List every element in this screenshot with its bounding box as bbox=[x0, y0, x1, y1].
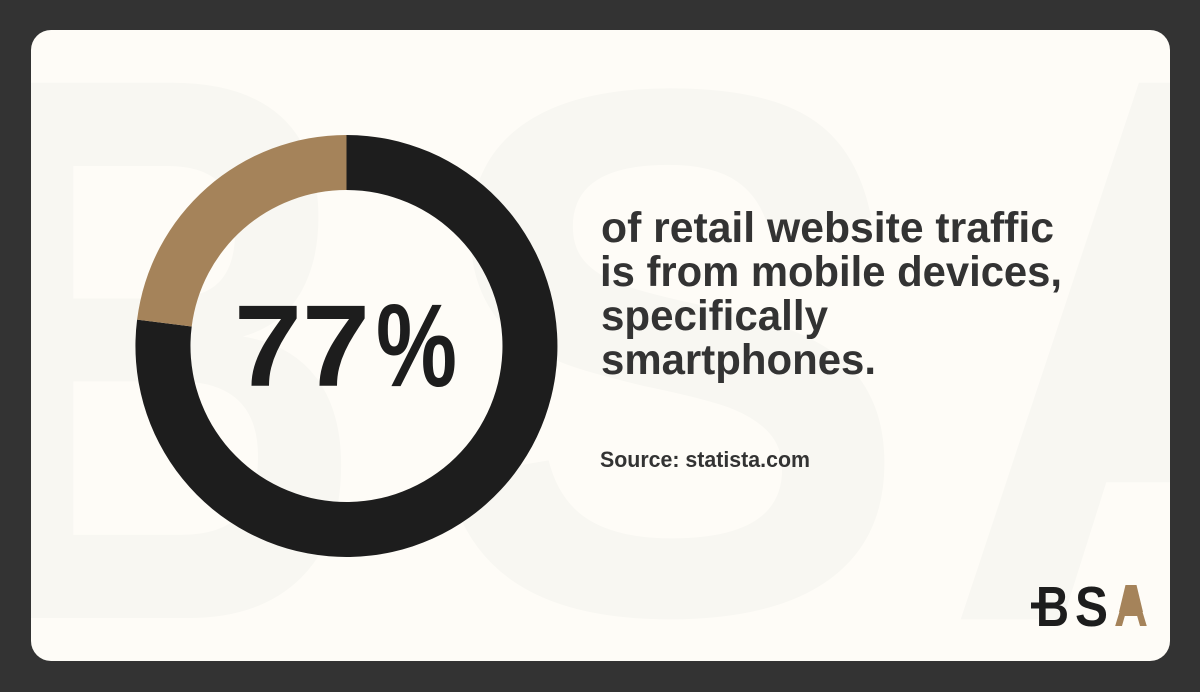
donut chart: 77 percent bbox=[135, 135, 557, 557]
text block: headline statistic: specifically bbox=[601, 292, 828, 340]
donut value: 77% bbox=[234, 280, 457, 412]
donut segment: tan 23 percent bbox=[137, 135, 346, 326]
logo bar through B bbox=[1031, 602, 1047, 608]
donut value: 77%: 77 bbox=[234, 281, 370, 411]
logo letter: A: A bbox=[1114, 575, 1148, 639]
donut value: 77%: % bbox=[376, 280, 457, 412]
donut segment: dark 77 percent bbox=[135, 135, 557, 557]
text block: headline statistic: of retail website traffic bbox=[601, 204, 1054, 252]
source note: Source: statista.com bbox=[600, 447, 810, 472]
text block: headline statistic: is from mobile devices, bbox=[600, 248, 1062, 296]
logo letter: B: B bbox=[1036, 575, 1069, 639]
logo letter: S: S bbox=[1075, 575, 1108, 639]
text block: headline statistic bbox=[600, 204, 1062, 384]
text block: headline statistic: smartphones. bbox=[601, 336, 876, 384]
logo: BSA bbox=[1031, 575, 1148, 639]
